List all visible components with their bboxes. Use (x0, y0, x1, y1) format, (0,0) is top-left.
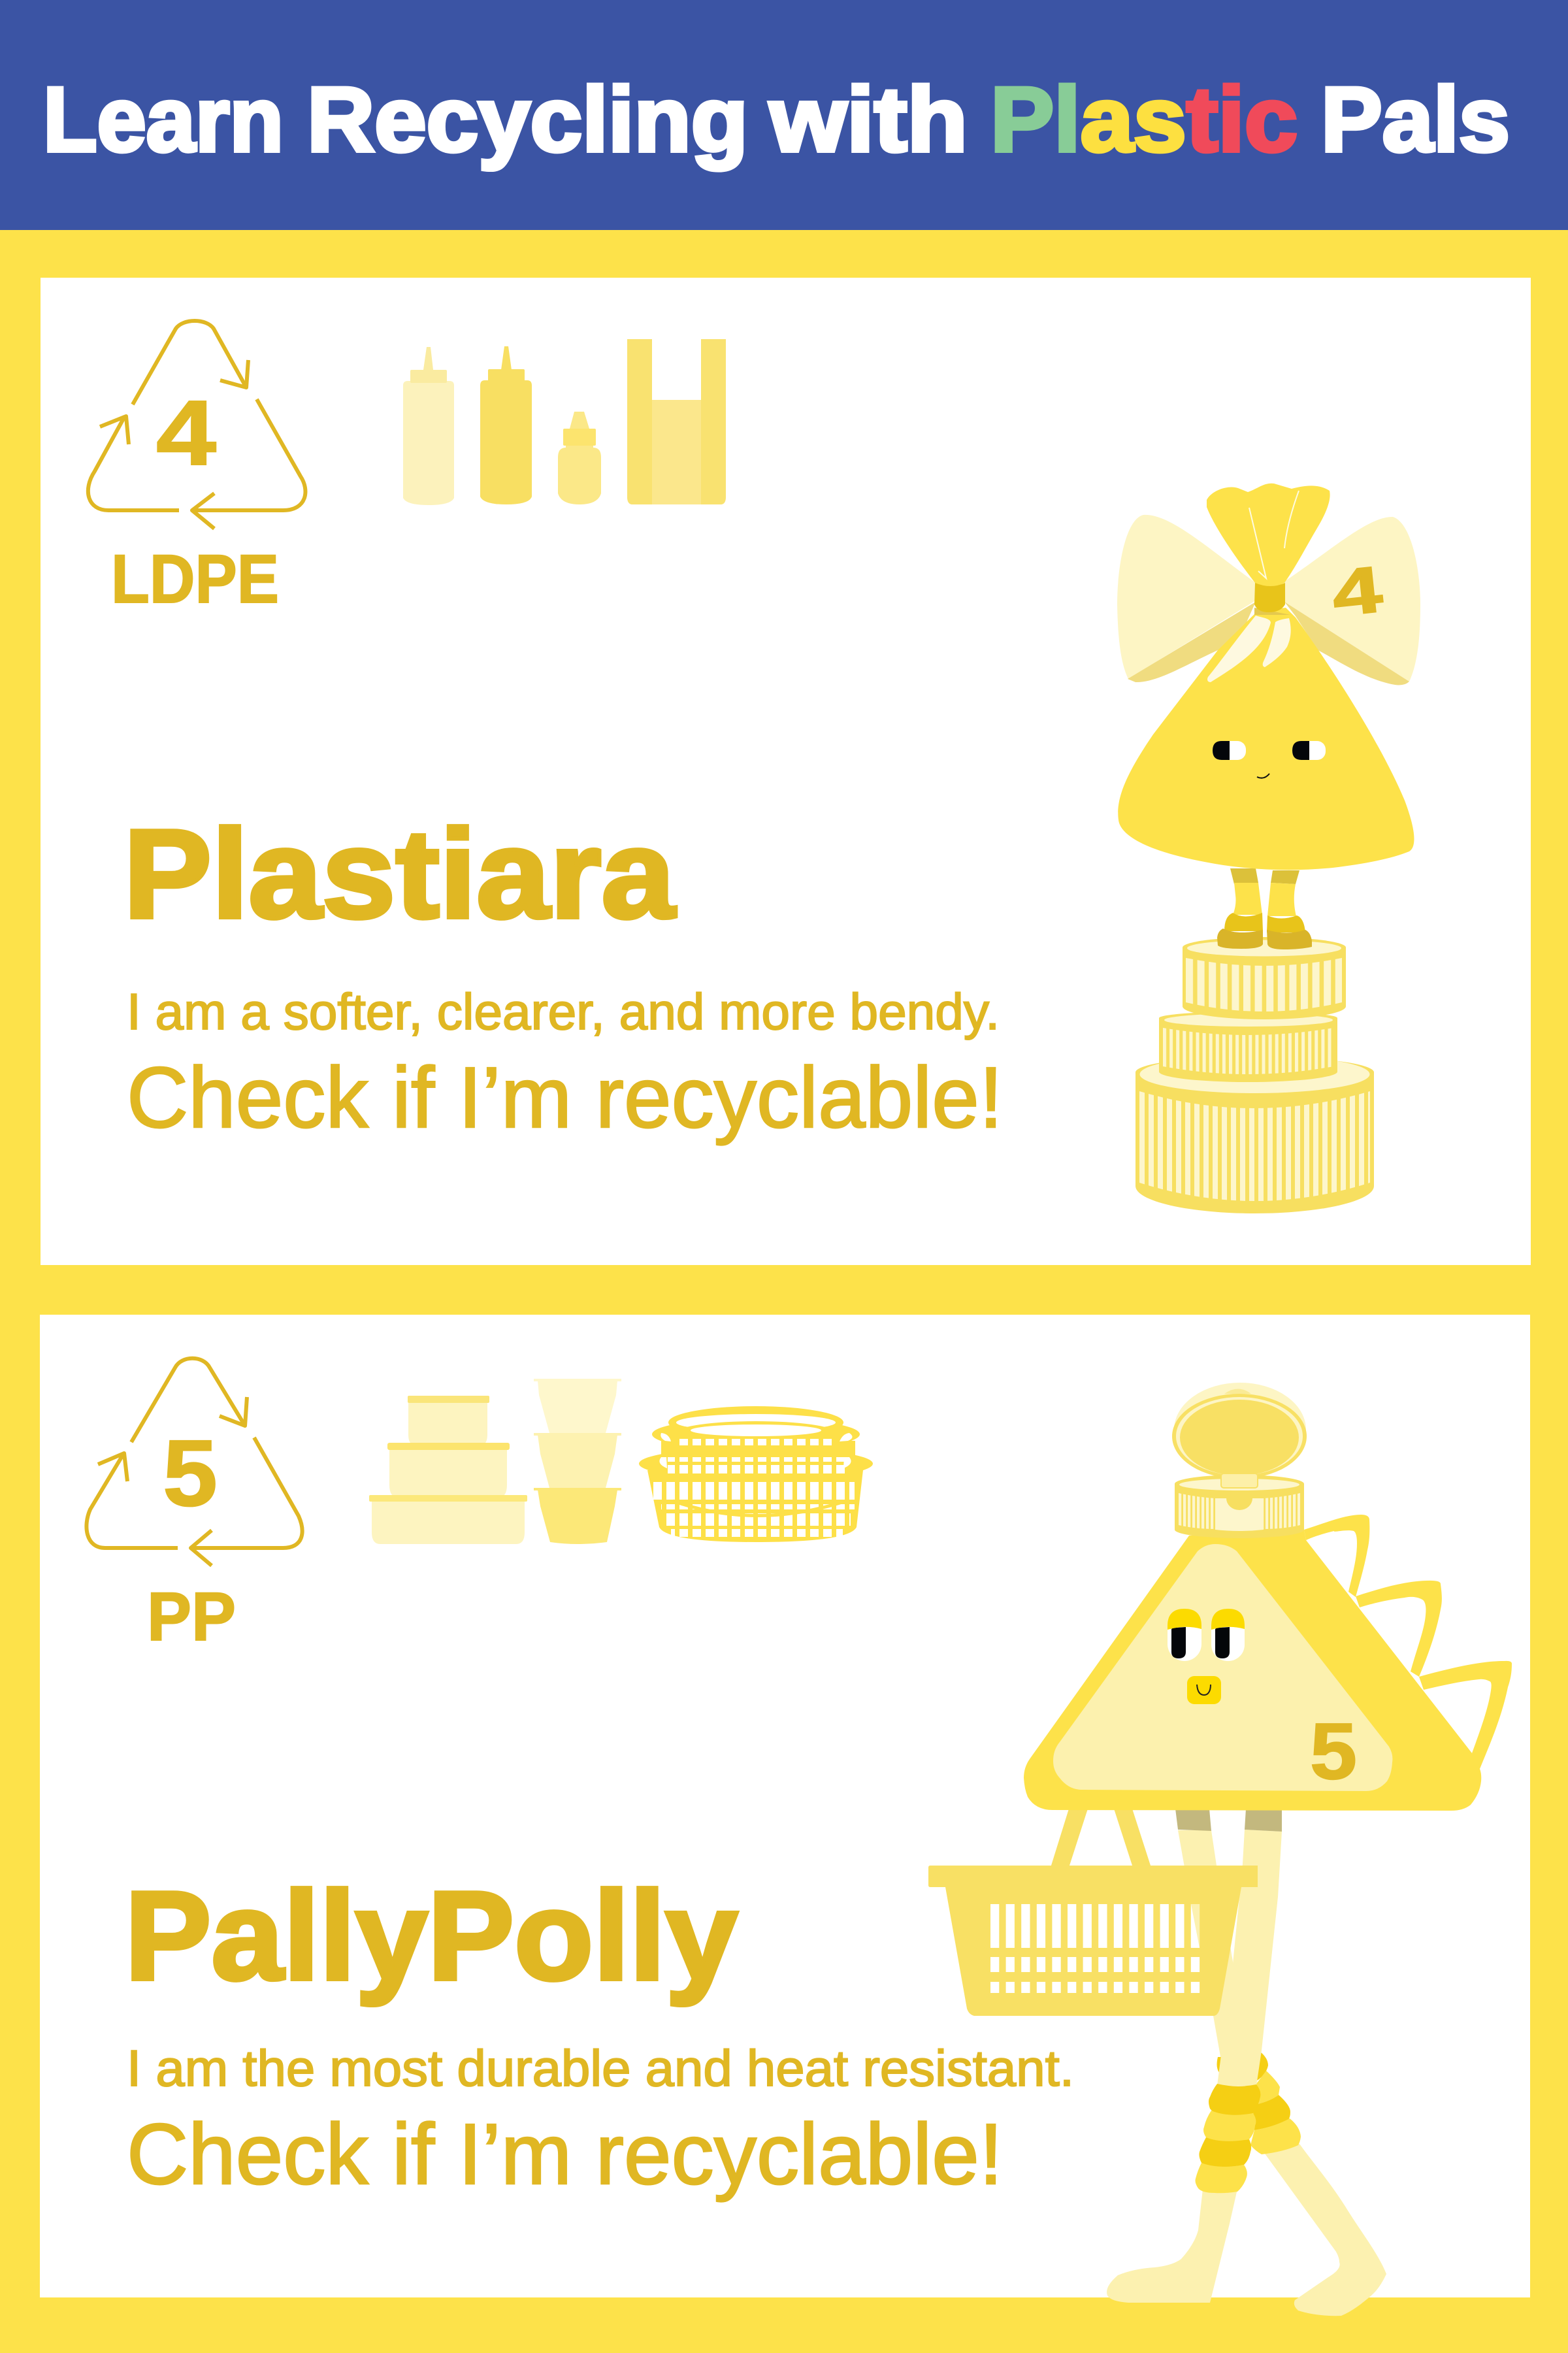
back leg (1178, 1830, 1241, 2060)
description LDPE: I am a softer, clearer, and more bendy. (127, 983, 1000, 1040)
number 5: 5 (163, 1421, 218, 1526)
number 5 on body: 5 (1310, 1707, 1357, 1796)
stacked lids (1135, 937, 1374, 1213)
eyes (1168, 1609, 1245, 1661)
call to action PP: Check if I’m recyclable! (127, 2106, 1003, 2202)
character name PallyPolly: PallyPolly (125, 1865, 738, 2006)
mouth (1257, 774, 1269, 778)
label LDPE: LDPE (111, 541, 279, 617)
icon: small bottle (558, 412, 601, 504)
knot (1254, 583, 1290, 615)
character name Plastiara: Plastiara (123, 803, 676, 944)
icon: stacked cups (534, 1379, 621, 1544)
title: with (769, 68, 968, 171)
icon: stacked food containers (369, 1396, 527, 1544)
title: Pals (1321, 68, 1510, 171)
title: Plastic (990, 68, 1298, 171)
front leg (1217, 1830, 1282, 2086)
title (43, 68, 1510, 171)
label PP: PP (147, 1579, 236, 1655)
leg bands (1175, 1809, 1282, 1832)
panel: LDPE background (41, 278, 1531, 1265)
icon: tall bottle dark (480, 346, 532, 504)
PP product icons (369, 1379, 873, 1544)
lid and cap (1172, 1383, 1307, 1538)
back fins (1304, 1515, 1512, 1769)
character: Plastiara (1117, 484, 1420, 1213)
back leg warmers (1217, 2052, 1386, 2316)
character: PallyPolly (928, 1383, 1512, 2316)
title: Recycling (307, 68, 748, 171)
LDPE product icons (403, 339, 726, 505)
icon: tall bottle pale (403, 347, 454, 505)
basket handles (1051, 1807, 1151, 1868)
bag gather (1207, 484, 1330, 587)
body (1118, 608, 1414, 870)
highlights (1207, 616, 1291, 682)
header band (0, 0, 1568, 230)
title: Learn (43, 68, 284, 171)
number 4: 4 (156, 381, 216, 484)
icon: nested baskets (639, 1406, 873, 1542)
shopping basket (928, 1866, 1258, 2016)
eyes (1213, 741, 1326, 760)
number 4 on bow: 4 (1329, 552, 1386, 631)
triangular body (1024, 1530, 1481, 1811)
recycling symbol 4 (88, 321, 305, 529)
icon: carrier bag (627, 339, 726, 504)
mouth (1187, 1676, 1221, 1704)
recycling symbol 5 (86, 1358, 302, 1566)
front foot (1107, 2189, 1237, 2303)
panel: PP background (40, 1315, 1530, 2297)
call to action LDPE: Check if I’m recyclable! (127, 1049, 1003, 1145)
bow wings (1117, 515, 1420, 685)
description PP: I am the most durable and heat resistant. (127, 2039, 1074, 2097)
legs and shoes (1217, 868, 1312, 949)
front leg warmers (1196, 2084, 1260, 2193)
cream face panel (1053, 1544, 1392, 1791)
